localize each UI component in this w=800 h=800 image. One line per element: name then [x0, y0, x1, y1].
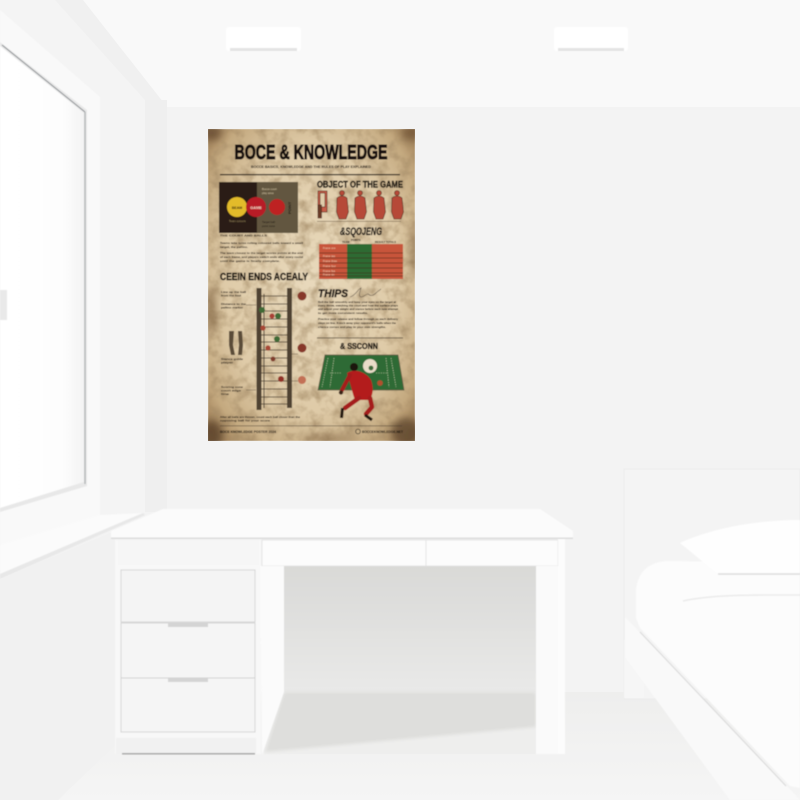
figure 4: [392, 190, 404, 219]
text block: tips: and adjust your weight and stance before each new attempt: [318, 307, 398, 311]
ball: red: [269, 199, 285, 215]
text block: diagram notes: [220, 234, 303, 263]
ladder diagram: [256, 288, 292, 410]
title: BOCE & KNOWLEDGE: [234, 141, 388, 164]
text block: ladder callouts: Distance to the: [221, 302, 247, 306]
text block: diagram notes: The team closest to the target scores points at the end: [220, 251, 303, 255]
ceiling: [80, 0, 800, 107]
mattress and duvet: [636, 561, 800, 788]
figures row: [318, 190, 404, 219]
text block: ladder callouts: Scoring zone: [221, 385, 244, 389]
heading: ends: CEEIN ENDS ACEALY: [220, 271, 308, 283]
left wall: [0, 0, 145, 570]
diagram labels: Bocce court: [262, 187, 277, 191]
scoring table: Frame one: [323, 246, 336, 250]
text block: ladder callouts: Stance guide: [221, 357, 244, 361]
text block: ladder callouts: player: [221, 360, 234, 364]
heading: object of the game: OBJECT OF THE GAME: [317, 180, 403, 190]
left wall lower shading: [0, 531, 115, 800]
text block: footer note: After all balls are thrown, count each ball closer than the: [220, 415, 300, 419]
ball in the air: [363, 359, 377, 373]
floor: [58, 692, 800, 800]
headboard: [624, 469, 800, 699]
bed: [624, 469, 800, 800]
diagram labels: [229, 187, 277, 228]
arm: [342, 375, 350, 390]
poster paper: [208, 129, 415, 441]
panel: game diagram: POINT: [287, 201, 292, 214]
text block: ladder callouts: Line up the ball: [221, 290, 246, 294]
ladder callout lines: [246, 305, 298, 390]
diagram labels: play area: [262, 191, 274, 195]
text block: footer note: [220, 415, 300, 422]
apron drawers: [262, 540, 426, 566]
text block: tips: stays on line. Knock away your opponent's balls when the: [318, 321, 396, 325]
scoring table: Frame five: [323, 269, 336, 273]
scoring table: Frame four: [323, 264, 336, 268]
scoring column labels: RESULT TOTALS: [375, 240, 396, 244]
text block: ladder callouts: [221, 290, 247, 396]
footer right: [356, 429, 404, 434]
scoring column labels: TEAM: [342, 240, 349, 244]
ball: BEAM: BEAM: [232, 206, 242, 210]
heading: scoring: &SQOJENG: [340, 226, 382, 238]
shoes: [342, 408, 343, 418]
plinth: [116, 738, 256, 754]
soffit band: [55, 0, 167, 107]
text block: footer note: opposing ball for your score: [220, 418, 270, 422]
panel: game diagram: [219, 182, 298, 233]
text block: tips: chance comes and play to your own strengths.: [318, 325, 386, 329]
figure 3: [374, 190, 386, 219]
space under desk: [284, 566, 537, 692]
aged stains: [201, 125, 421, 448]
drawer 3: [121, 678, 255, 732]
green court: [318, 355, 404, 390]
frame edge shadow: [640, 632, 786, 786]
duvet fold: [683, 595, 800, 601]
diagram labels: Target ball: [262, 220, 275, 224]
scoring column labels: [342, 238, 396, 244]
right leg: [536, 566, 565, 754]
drawer 1: [121, 570, 255, 622]
ball: GAME: GAME: [250, 206, 262, 210]
figure: door: [318, 191, 327, 218]
text block: tips: Practice your release and follow through so each delivery: [318, 317, 398, 321]
drawer cabinet: [115, 540, 261, 754]
diagram labels: point zone: [262, 224, 275, 228]
bed leg: [624, 640, 644, 698]
pillow: [680, 520, 800, 574]
text block: tips: every throw, watching the court and how the surface plays: [318, 304, 398, 308]
text block: tips: Roll the ball smoothly and keep your eyes on the target at: [318, 300, 396, 304]
text block: ladder callouts: court edge: [221, 388, 242, 392]
side balls: [298, 292, 306, 384]
back wall: [167, 107, 800, 693]
text block: diagram notes: target, the pallino.: [220, 245, 248, 249]
window sill: [0, 513, 143, 574]
top cabinet panel: [118, 540, 259, 565]
text block: diagram notes: THE COURT AND BALLS: [220, 234, 267, 238]
text block: diagram notes: of each frame, and players switch ends after every round: [220, 255, 303, 259]
scoring table: Frame two: [323, 254, 336, 258]
scoring column labels: POINTS: [351, 238, 361, 242]
window: [0, 10, 145, 579]
footer right: BOCCEKNOWLEDGE.NET: [362, 430, 404, 434]
desk: [111, 509, 573, 755]
text block: diagram notes: until the game is finally complete.: [220, 259, 280, 263]
text block: tips: to get more consistent results.: [318, 311, 368, 315]
legs: [345, 398, 359, 408]
desk top: [111, 509, 573, 539]
drawer 2: [121, 623, 255, 678]
figure 1: [336, 190, 348, 219]
paper mottling: [208, 129, 415, 441]
torso: [347, 371, 373, 400]
heading: tips: THIPS: [318, 288, 349, 300]
figure 2: [354, 190, 366, 219]
scoring table: Frame three: [323, 259, 338, 263]
ladder balls: [259, 307, 284, 382]
scoring table: Frame six: [323, 272, 335, 276]
text block: diagram notes: Teams take turns rolling coloured balls toward a small: [220, 241, 303, 245]
poster: [201, 125, 421, 448]
text block: ladder callouts: line: [221, 392, 230, 396]
ceiling light: right: [554, 27, 628, 51]
text block: ladder callouts: from the foul: [221, 294, 241, 298]
ceiling light: left: [226, 27, 301, 51]
footer left: BOCE KNOWLEDGE POSTER 2024: [220, 430, 276, 434]
text block: tips: [318, 300, 398, 329]
subtitle: BOCCE BASICS, KNOWLEDGE AND THE RULES OF PLAY EXPLAINED: [251, 165, 371, 169]
signature scribble: [350, 288, 381, 297]
bed frame: [625, 617, 800, 800]
player figure: [339, 359, 383, 420]
text block: ladder callouts: pallino marker: [221, 306, 244, 310]
diagram labels: Team colours: [229, 219, 246, 223]
scoring table: [319, 244, 403, 279]
heading: sconn: & SSCONN: [340, 341, 378, 351]
small stance figures: [229, 331, 243, 355]
